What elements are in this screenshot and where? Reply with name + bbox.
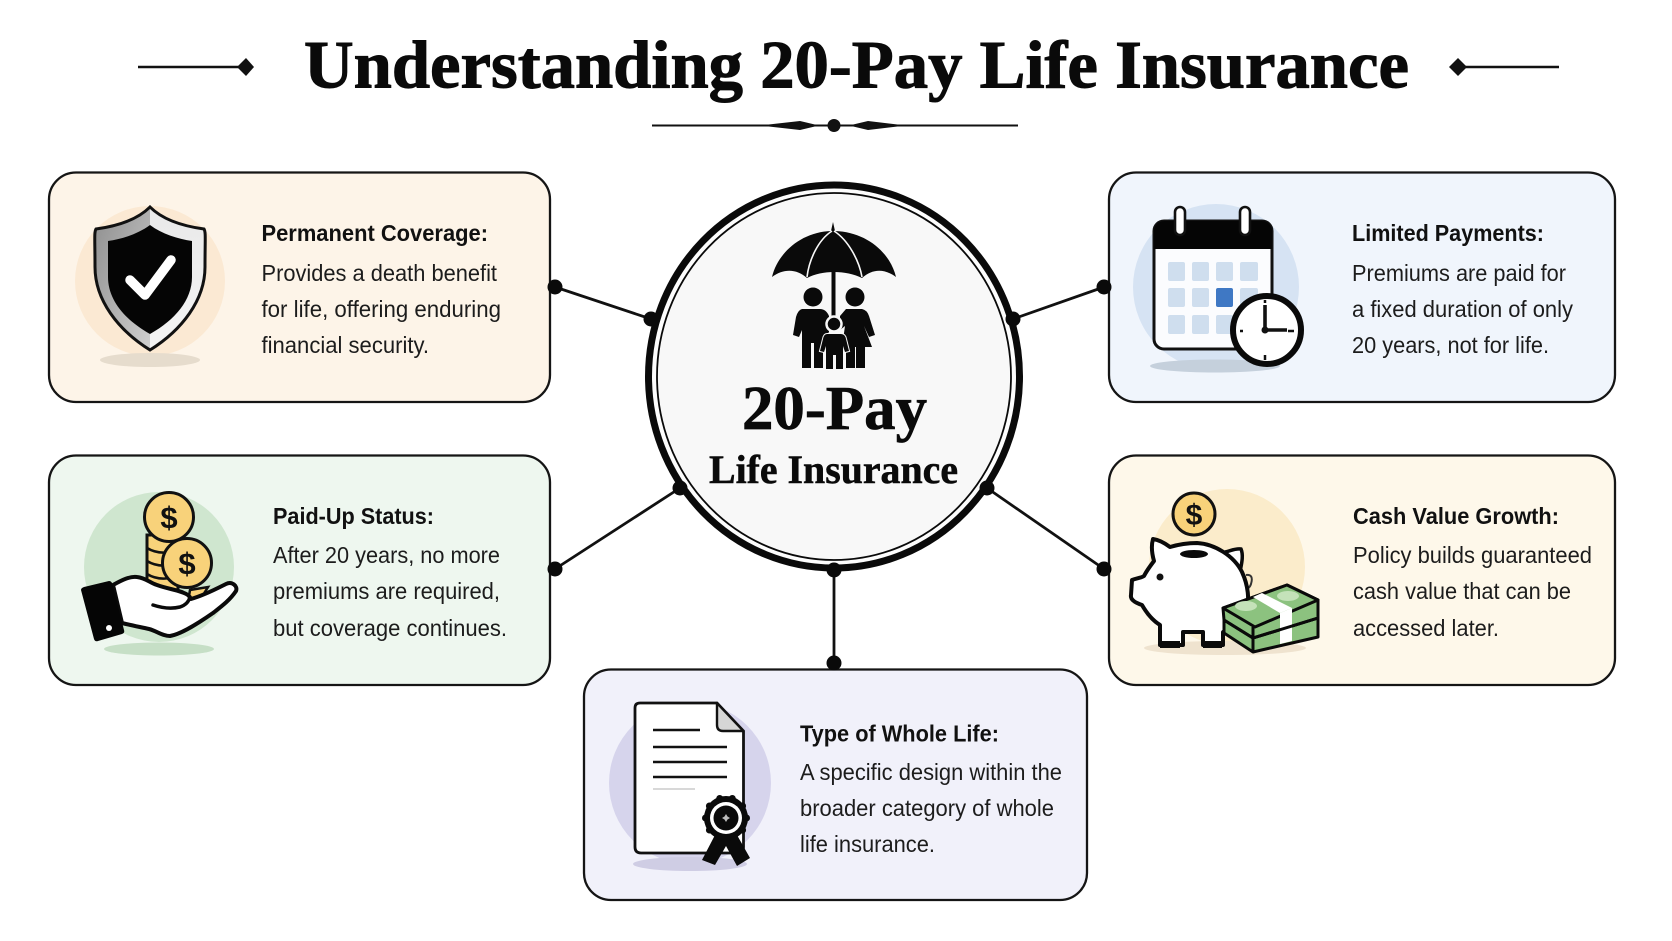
- center label: 20-Pay: [742, 375, 927, 443]
- text: permanent coverage: financial security.: [262, 332, 429, 358]
- icon: policy document with seal: [609, 702, 771, 871]
- title: Understanding 20-Pay Life Insurance: [304, 26, 1409, 102]
- icon: umbrella over family: [772, 222, 896, 369]
- text: permanent coverage: Provides a death benefit: [262, 260, 497, 286]
- panel: type of whole life: [584, 670, 1087, 900]
- text: paid-up status: After 20 years, no more: [273, 542, 500, 568]
- text: cash value growth: cash value that can be: [1353, 578, 1571, 604]
- text: limited payments: a fixed duration of only: [1352, 296, 1573, 322]
- icon: calendar and clock: [1133, 204, 1301, 372]
- icon: piggy bank with cash: [1131, 489, 1318, 655]
- icon: hand holding coins: $: [178, 546, 196, 581]
- text: type of whole life: A specific design within the: [800, 759, 1062, 785]
- center circle: 20-Pay Life Insurance: [644, 185, 1020, 578]
- connector dots on cards: [548, 280, 1112, 670]
- text: cash value growth: accessed later.: [1353, 615, 1499, 641]
- text: paid-up status: but coverage continues.: [273, 615, 507, 641]
- center label: [709, 375, 958, 492]
- text: limited payments: [1352, 220, 1573, 358]
- panel: permanent coverage: [49, 172, 550, 402]
- connector lines: [555, 287, 1104, 663]
- panel: cash value growth: [1109, 456, 1615, 685]
- title ornament: right: [1449, 58, 1559, 76]
- text: cash value growth: Policy builds guaranteed: [1353, 542, 1592, 568]
- text: type of whole life: [800, 720, 1062, 857]
- text: limited payments: 20 years, not for life.: [1352, 332, 1549, 358]
- text: type of whole life: Type of Whole Life:: [800, 720, 999, 746]
- text: cash value growth: Cash Value Growth:: [1353, 503, 1559, 529]
- title underline ornament: [652, 119, 1018, 132]
- text: type of whole life: life insurance.: [800, 831, 935, 857]
- text: type of whole life: broader category of whole: [800, 795, 1054, 821]
- text: permanent coverage: Permanent Coverage:: [262, 220, 488, 246]
- text: limited payments: Limited Payments:: [1352, 220, 1544, 246]
- panel: paid-up status: [49, 456, 550, 685]
- text: paid-up status: premiums are required,: [273, 578, 500, 604]
- icon: piggy bank with cash: $: [1186, 499, 1203, 532]
- icon: hand holding coins: $: [160, 500, 178, 535]
- icon: hand holding coins: [81, 492, 236, 656]
- text: permanent coverage: for life, offering enduring: [262, 296, 501, 322]
- panel: limited payments: [1109, 172, 1615, 402]
- center label: Life Insurance: [709, 447, 958, 492]
- text: paid-up status: [273, 503, 507, 641]
- text: paid-up status: Paid-Up Status:: [273, 503, 434, 529]
- connector dots on circle: [644, 312, 1020, 578]
- text: permanent coverage: [262, 220, 501, 358]
- text: limited payments: Premiums are paid for: [1352, 260, 1566, 286]
- icon: shield with check: [75, 206, 225, 367]
- title ornament: left: [138, 58, 254, 76]
- text: cash value growth: [1353, 503, 1592, 641]
